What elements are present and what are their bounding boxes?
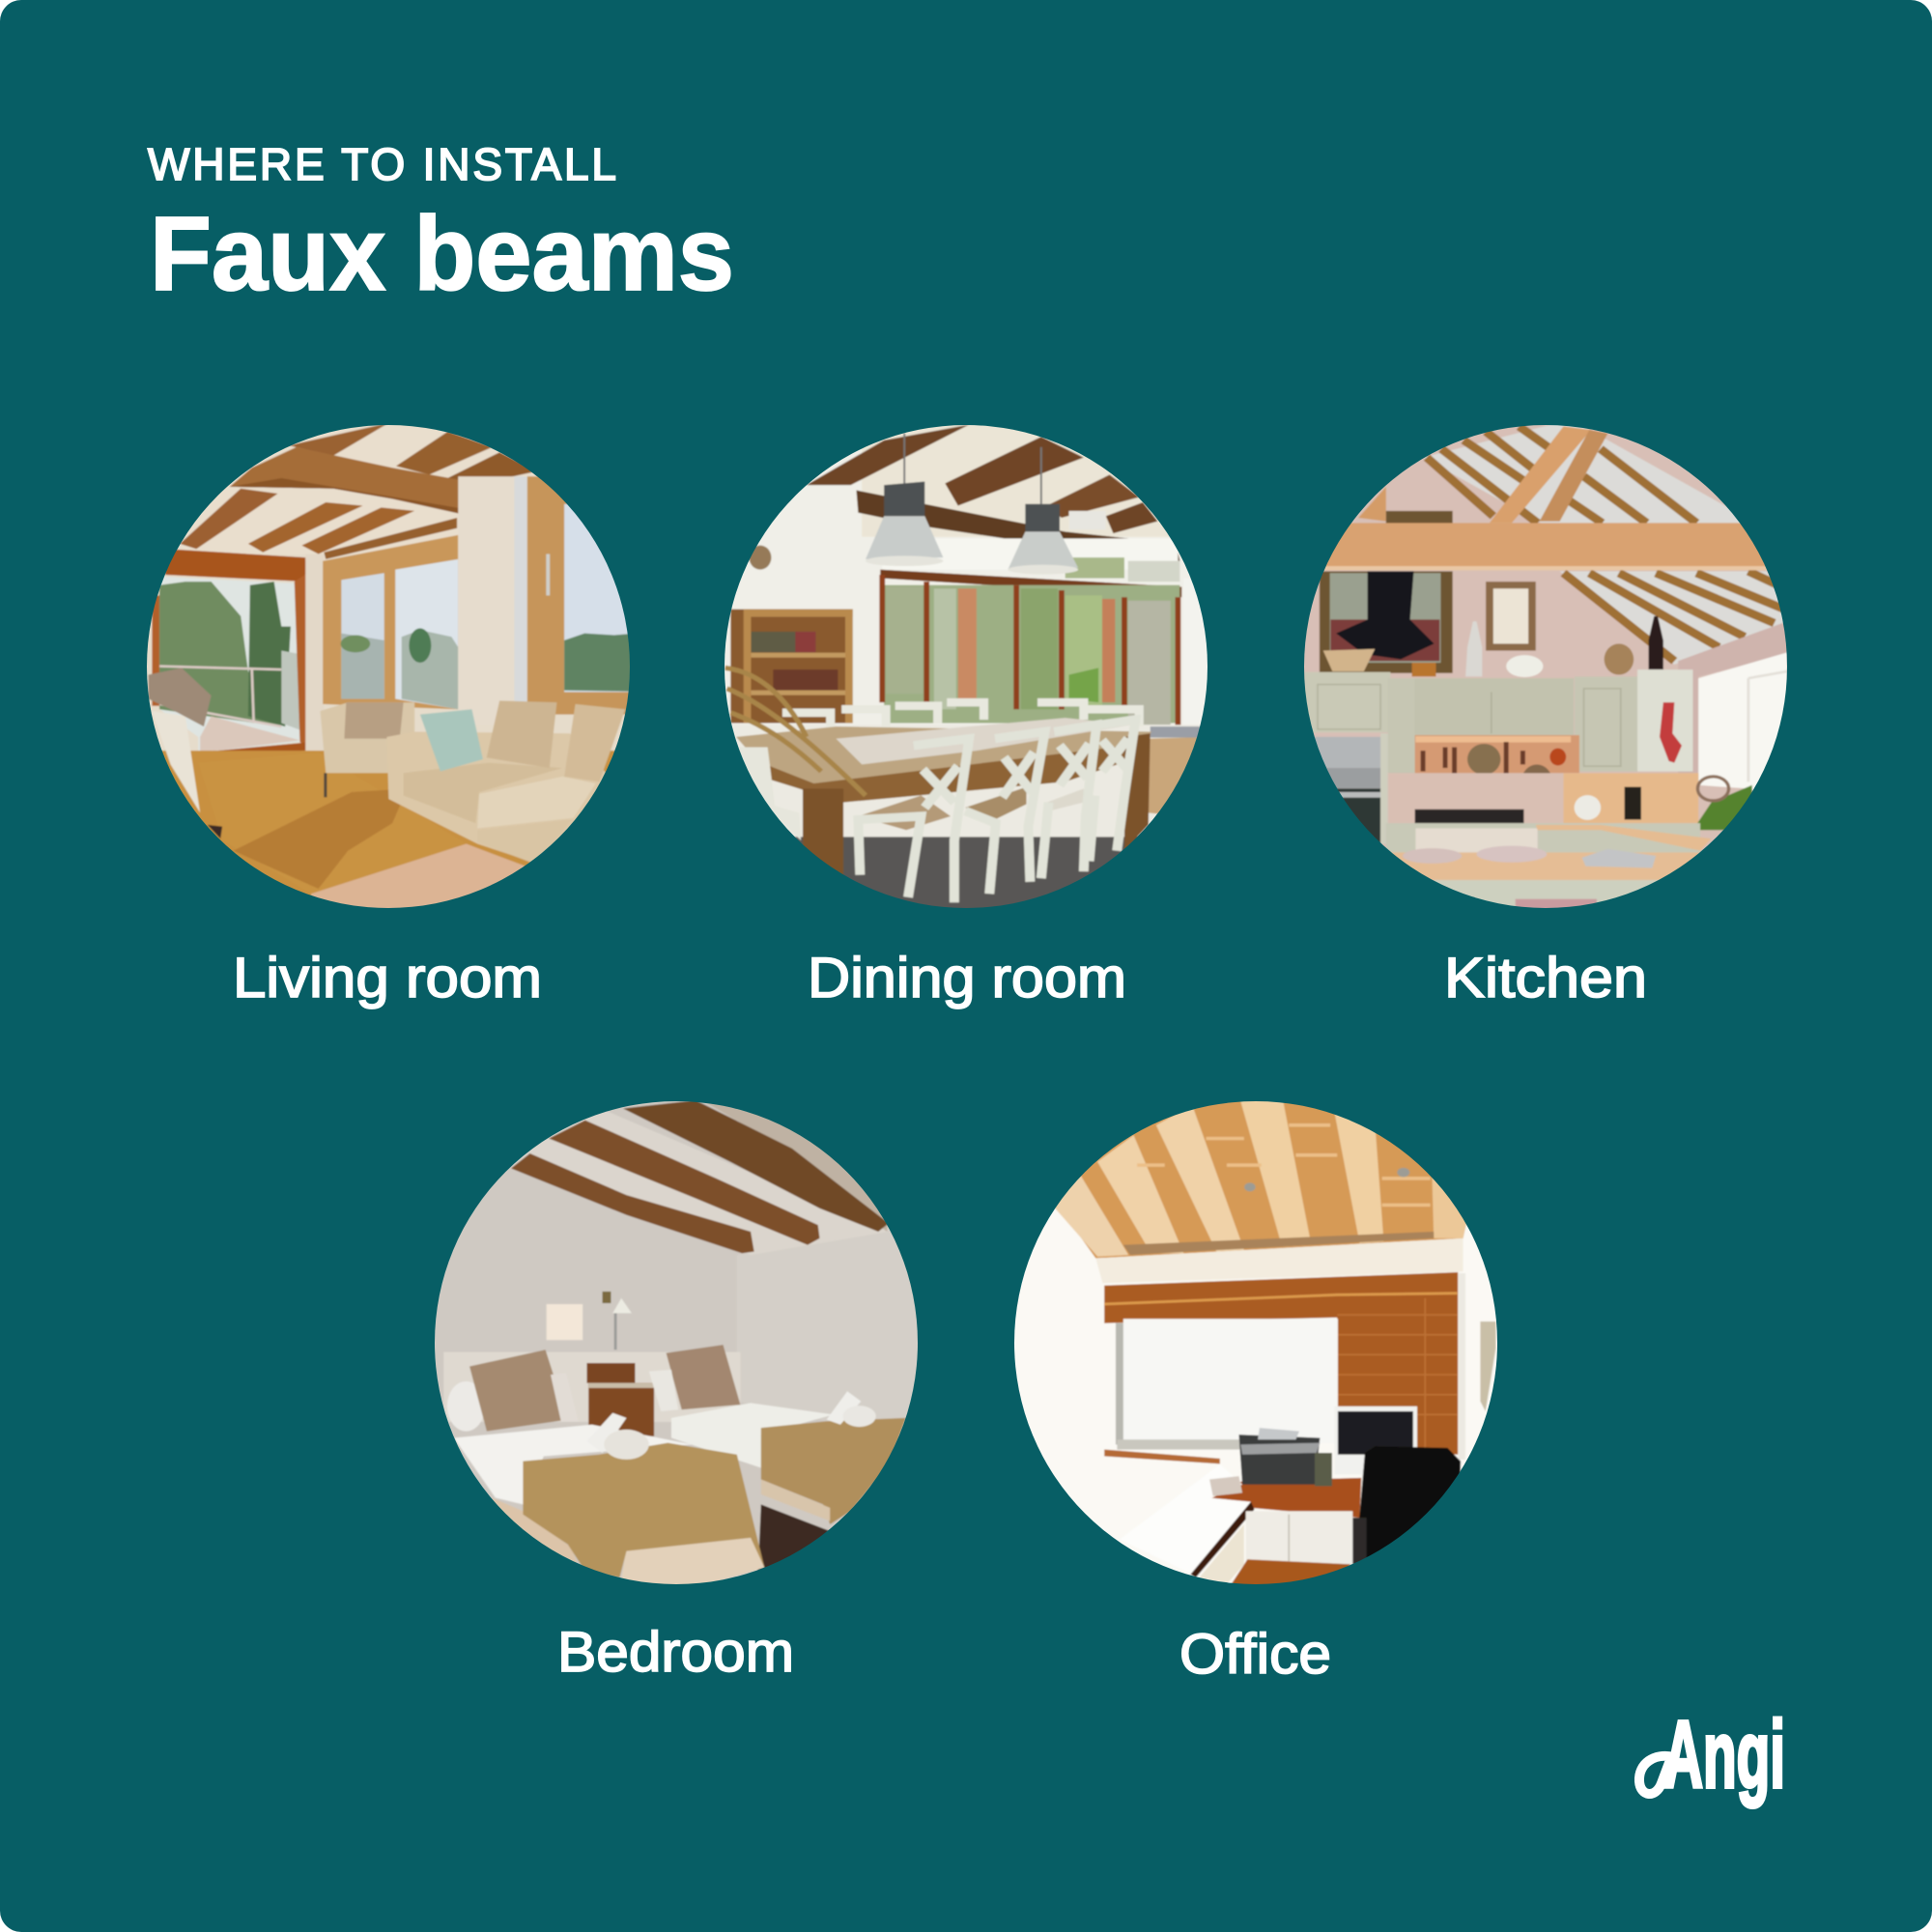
main title: Faux beams xyxy=(150,195,734,313)
label: Kitchen: Kitchen xyxy=(1444,947,1647,1009)
title block xyxy=(148,139,734,313)
logo swash xyxy=(1639,1756,1674,1794)
Angi logo xyxy=(1639,1701,1785,1807)
panel: living room xyxy=(147,425,630,1009)
eyebrow heading: WHERE TO INSTALL xyxy=(148,139,616,189)
photo: home office with pine ceiling xyxy=(1014,1101,1497,1584)
photo: dining room with dark beams xyxy=(724,425,1208,908)
photo: bedroom with sloped beams xyxy=(435,1101,918,1584)
label: Living room: Living room xyxy=(233,947,542,1009)
label: Bedroom: Bedroom xyxy=(557,1621,794,1684)
photo: living room with wood beams xyxy=(147,425,630,908)
panel: office xyxy=(1014,1101,1497,1675)
panel: bedroom xyxy=(435,1101,918,1673)
label: Office: Office xyxy=(1179,1623,1331,1686)
label: Dining room: Dining room xyxy=(808,947,1126,1009)
panel: dining room xyxy=(724,425,1208,1009)
logo wordmark: Angi xyxy=(1663,1701,1785,1807)
panel: kitchen xyxy=(1304,425,1787,999)
photo: kitchen with exposed trusses xyxy=(1304,425,1787,908)
